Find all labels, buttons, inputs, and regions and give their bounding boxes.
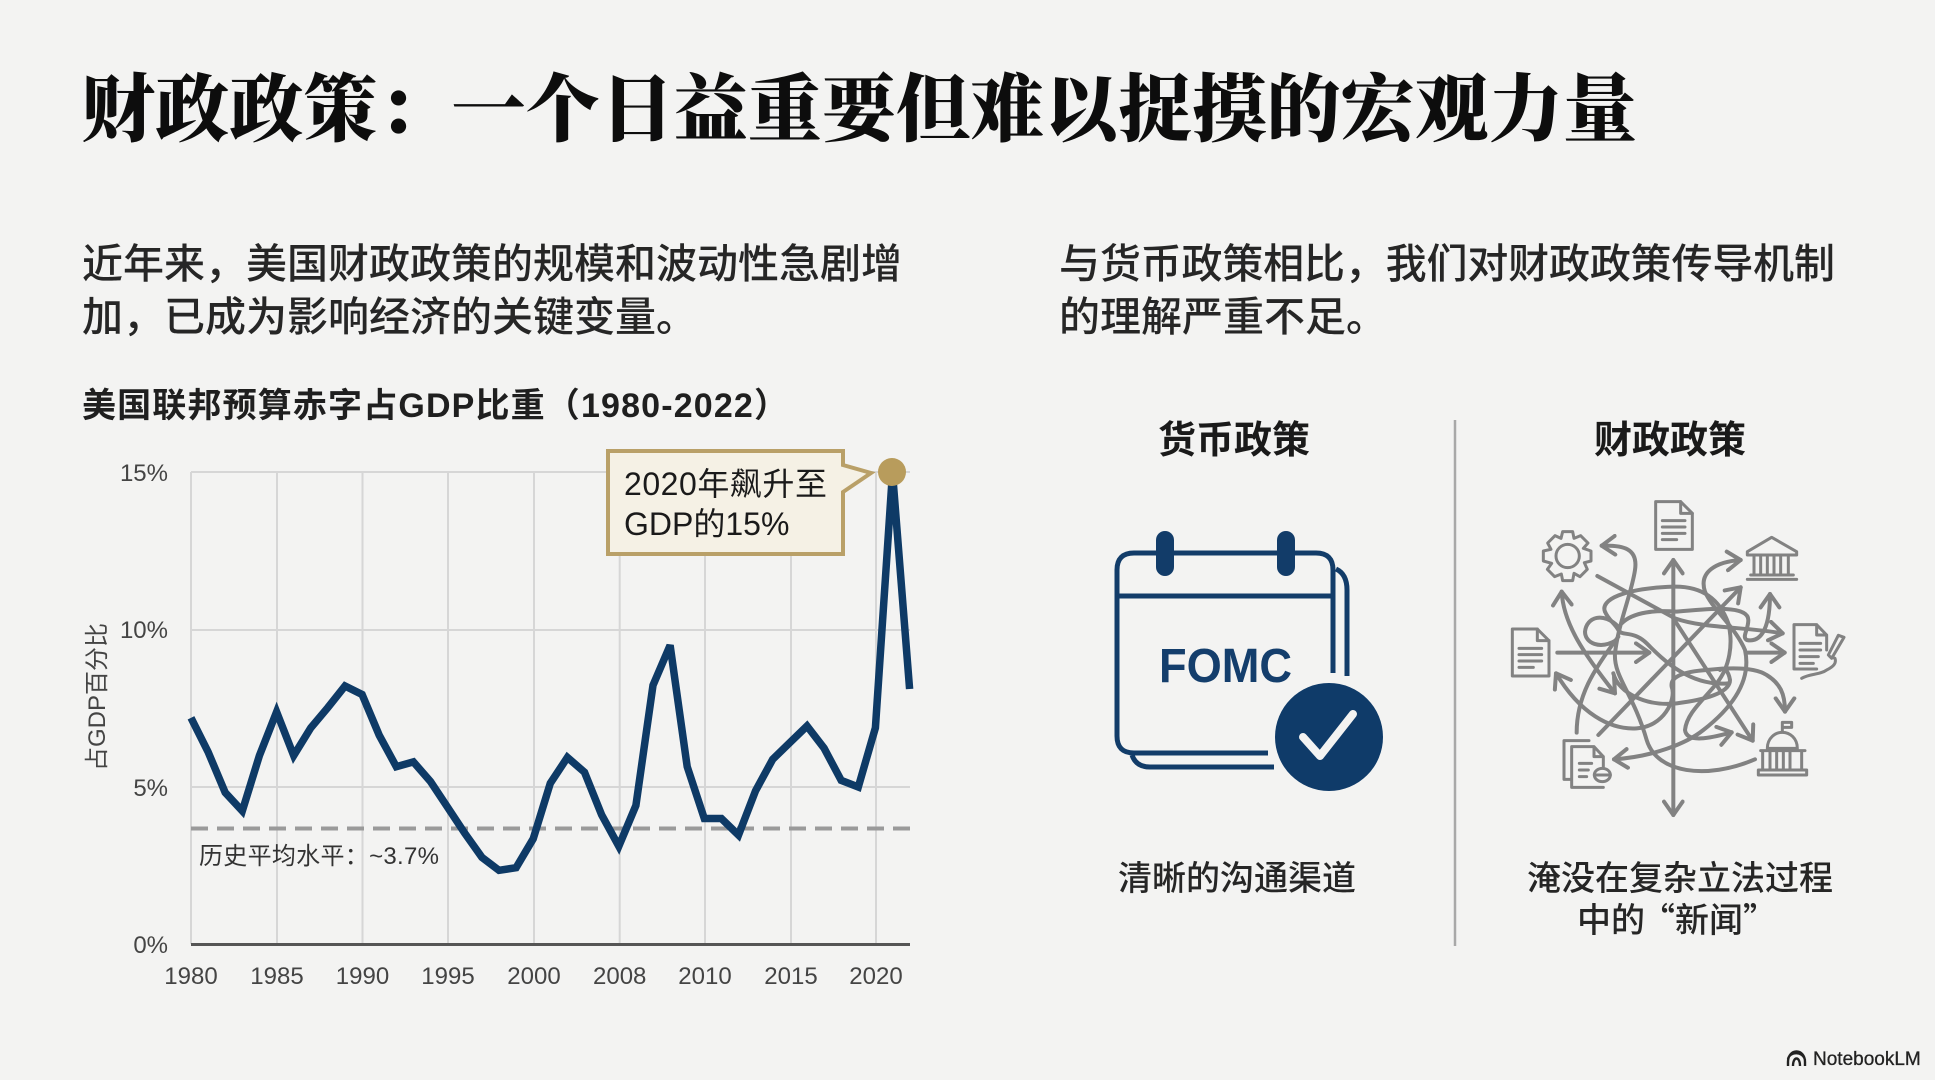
- y axis tick labels: 15%: [120, 460, 168, 487]
- callout: 2020 peak: [608, 451, 871, 554]
- footer: NotebookLM brand: NotebookLM: [1813, 1049, 1921, 1070]
- icon: FOMC calendar with check: [1117, 531, 1383, 791]
- icon: capitol: [1758, 722, 1807, 775]
- y axis tick labels: 10%: [120, 617, 168, 644]
- callout: 2020 peak: 2020年飙升至: [624, 466, 827, 502]
- icon: FOMC calendar with check: FOMC: [1159, 640, 1292, 693]
- line chart: deficit share of GDP: [84, 451, 910, 990]
- icon: tangled arrows between documents and institutions: [1512, 502, 1844, 815]
- heading: fiscal policy: 财政政策: [1594, 420, 1746, 462]
- title: 财政政策：一个日益重要但难以捉摸的宏观力量: [81, 70, 1637, 152]
- historical average dashed line: [191, 826, 910, 830]
- gridlines: [191, 472, 910, 944]
- x axis tick labels: 2000: [507, 963, 561, 990]
- text block: right intro: 的理解严重不足。: [1059, 294, 1387, 340]
- caption: buried in legislative news: 中的: [1577, 893, 1645, 942]
- callout: 2020 peak: GDP的15%: [624, 506, 789, 542]
- heading: monetary policy: 货币政策: [1158, 420, 1310, 462]
- x axis tick labels: 2010: [678, 963, 732, 990]
- caption: clear communication: 清晰的沟通渠道: [1118, 860, 1356, 898]
- icon: bank: [1747, 537, 1797, 579]
- tangled arrows: [1556, 546, 1785, 815]
- text block: left intro: [82, 241, 902, 340]
- icon: document stack: [1564, 741, 1610, 787]
- text block: right intro: [1059, 241, 1835, 340]
- icon: gear: [1543, 532, 1591, 581]
- x axis baseline: [191, 943, 910, 946]
- x axis tick labels: 1990: [336, 963, 389, 990]
- icon: top document: [1656, 502, 1692, 549]
- historical average label: 历史平均水平：~3.7%: [199, 843, 439, 870]
- x axis tick labels: 2008: [593, 963, 646, 990]
- y axis title: 占GDP百分比: [84, 623, 111, 771]
- y axis tick labels: [120, 460, 168, 959]
- y axis tick labels: 5%: [133, 775, 168, 802]
- panel: monetary policy: [1117, 420, 1383, 898]
- x axis tick labels: 1985: [250, 963, 304, 990]
- divider: [1454, 420, 1456, 946]
- caption: buried in legislative news: [1527, 860, 1833, 942]
- panel: fiscal policy: [1512, 420, 1844, 942]
- x axis tick labels: 1995: [421, 963, 475, 990]
- text block: left intro: 加，已成为影响经济的关键变量。: [82, 294, 697, 340]
- icon: left document: [1512, 629, 1549, 676]
- x axis tick labels: [164, 963, 903, 990]
- chart title: 美国联邦预算赤字占GDP比重（1980-2022）: [82, 387, 788, 425]
- text block: right intro: 与货币政策相比，我们对财政政策传导机制: [1059, 241, 1835, 287]
- x axis tick labels: 2015: [764, 963, 818, 990]
- caption: buried in legislative news: “新闻”: [1641, 893, 1777, 942]
- y axis tick labels: 0%: [133, 932, 168, 959]
- deficit line: [191, 472, 910, 870]
- icon: signed document: [1794, 625, 1844, 678]
- x axis tick labels: 2020: [849, 963, 903, 990]
- peak marker: [878, 458, 906, 486]
- caption: buried in legislative news: 淹没在复杂立法过程: [1527, 860, 1833, 898]
- text block: left intro: 近年来，美国财政政策的规模和波动性急剧增: [82, 241, 902, 287]
- x axis tick labels: 1980: [164, 963, 218, 990]
- icon: NotebookLM logo: [1788, 1052, 1805, 1066]
